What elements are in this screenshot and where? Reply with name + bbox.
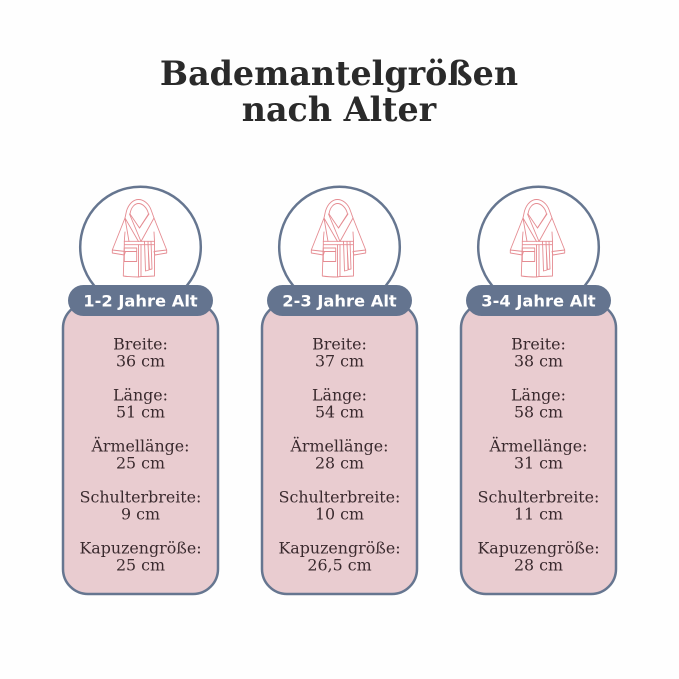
size card: Länge: <box>312 386 367 404</box>
title: Bademantelgrößen <box>160 54 518 93</box>
age label pill: 1-2 Jahre Alt <box>83 292 198 310</box>
size card: Breite: <box>312 334 367 354</box>
size card: 38 cm <box>514 352 563 370</box>
size card: Schulterbreite: <box>478 488 599 506</box>
size card: Schulterbreite: <box>80 488 201 506</box>
size card: 28 cm <box>514 556 563 574</box>
size card: 9 cm <box>121 504 160 524</box>
icon: bathrobe in circle <box>478 187 599 307</box>
size card: Länge: <box>113 386 168 404</box>
size card <box>262 303 417 594</box>
icon: bathrobe in circle <box>80 187 201 307</box>
age label pill <box>267 285 412 316</box>
age label pill <box>68 285 213 316</box>
title: nach Alter <box>242 90 437 129</box>
size card: 25 cm <box>116 556 165 574</box>
icon: bathrobe in circle <box>279 187 400 307</box>
size card: Ärmellänge: <box>90 436 190 456</box>
size card: 54 cm <box>315 402 364 422</box>
size card: Länge: <box>511 386 566 404</box>
size card: Kapuzengröße: <box>278 538 401 558</box>
age label pill: 3-4 Jahre Alt <box>481 292 596 310</box>
size card: 11 cm <box>514 504 563 524</box>
size card: Kapuzengröße: <box>477 538 600 558</box>
panel: 2-3 Jahre Alt <box>262 187 417 594</box>
size card: 36 cm <box>116 352 165 370</box>
size card: Ärmellänge: <box>488 436 588 456</box>
size card: 26,5 cm <box>307 556 372 574</box>
size card: Kapuzengröße: <box>79 538 202 558</box>
title <box>160 54 518 129</box>
panel: 1-2 Jahre Alt <box>63 187 218 594</box>
size card: Breite: <box>113 334 168 354</box>
size card: 51 cm <box>116 402 165 422</box>
size card: Breite: <box>511 334 566 354</box>
size card: 28 cm <box>315 454 364 472</box>
size card: 25 cm <box>116 454 165 472</box>
age label pill <box>466 285 611 316</box>
size card <box>461 303 616 594</box>
age label pill: 2-3 Jahre Alt <box>282 292 397 310</box>
size card <box>63 303 218 594</box>
size card: 31 cm <box>514 454 563 472</box>
size card: 58 cm <box>514 402 563 422</box>
size card: Schulterbreite: <box>279 488 400 506</box>
size card: 37 cm <box>315 352 364 370</box>
size card: Ärmellänge: <box>289 436 389 456</box>
panel: 3-4 Jahre Alt <box>461 187 616 594</box>
size card: 10 cm <box>315 504 364 524</box>
